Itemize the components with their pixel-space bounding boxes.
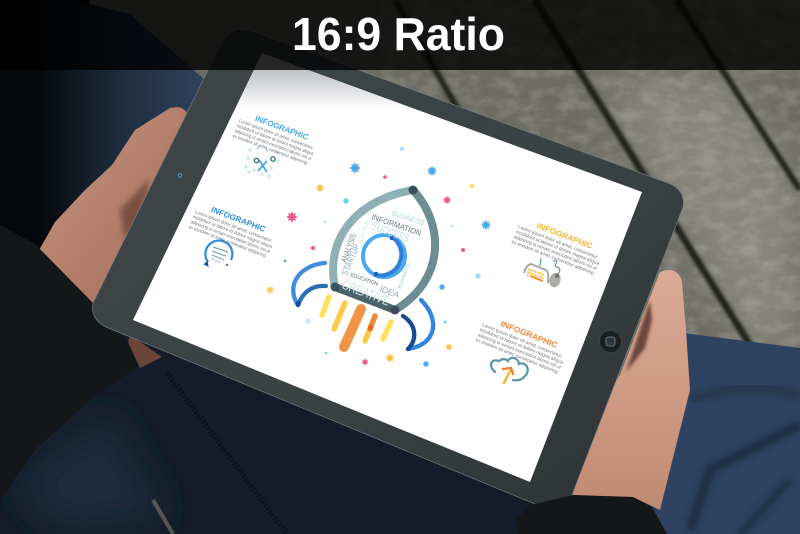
- text block: top left: [232, 109, 321, 167]
- heading: INFOGRAPHIC: [254, 114, 310, 142]
- word cloud: [339, 208, 425, 309]
- word cloud: BUSINESS: [390, 208, 425, 227]
- body text: incididunt ut labore et dolore magna aliqua: [515, 229, 600, 267]
- body text: incididunt ut labore et dolore magna aliqua: [479, 327, 564, 366]
- photo: jeans bottom: [0, 290, 800, 534]
- photo: dark left side and jeans top: [0, 0, 205, 300]
- word cloud: STARTUP: [340, 242, 363, 277]
- word cloud: SUCCESS: [370, 221, 411, 245]
- heading: INFOGRAPHIC: [499, 319, 559, 350]
- body text: adipiscing ut veniam exercitation laboris nisi ut: [234, 128, 313, 162]
- title: 16:9 Ratio: [292, 8, 505, 60]
- tablet home button: [600, 330, 622, 352]
- tablet screen: [133, 53, 642, 482]
- text block: top right: [511, 215, 606, 277]
- body text: adipiscing ut veniam exercitation laboris nisi ut: [477, 332, 562, 371]
- body text: Lorem ipsum dolor sit amet, consectetur,: [194, 209, 273, 244]
- icon: cloud upload: [491, 358, 528, 383]
- body text: ex eiusdem sit amet, consectetur adipiscing: [511, 239, 595, 276]
- title bar: [0, 0, 800, 70]
- word cloud: IDEA: [378, 284, 401, 300]
- tablet camera: [178, 174, 182, 177]
- body text: Lorem ipsum dolor sit amet, consectetur,: [481, 322, 563, 360]
- word cloud: INFORMATION: [370, 212, 423, 238]
- body text: ex eiusdem sit amet, consectetur adipiscing: [232, 133, 308, 166]
- icon: keyboard and mouse: [524, 258, 562, 289]
- photo: right sleeve: [516, 495, 667, 534]
- body text: incididunt ut labore et dolore magna aliqua: [192, 214, 273, 250]
- flames: [322, 297, 391, 347]
- body text: Lorem ipsum dolor sit amet, consectetur,: [517, 224, 599, 261]
- rocket body: [330, 186, 435, 314]
- word cloud: BUSINESS: [397, 263, 412, 290]
- body text: Lorem ipsum dolor sit amet, consectetur,: [238, 118, 314, 151]
- fin right: [403, 300, 433, 349]
- tablet: [93, 29, 683, 512]
- word cloud: EDUCATION: [349, 272, 379, 288]
- decorative stars: [267, 147, 490, 366]
- heading: INFOGRAPHIC: [535, 221, 594, 251]
- body text: [232, 118, 317, 167]
- body text: adipiscing ut veniam exercitation laboris nisi ut: [190, 219, 271, 255]
- fin left: [293, 263, 326, 307]
- word cloud: SOLUTION: [358, 219, 371, 244]
- word cloud: ANALYSIS: [339, 232, 358, 264]
- icon: speech bubble: [204, 241, 232, 266]
- photo: left hand: [38, 107, 188, 368]
- body text: ex eiusdem sit amet, consectetur adipiscing: [188, 224, 267, 259]
- photo: right hand: [573, 270, 690, 510]
- icon: crossed tools and gears: [244, 146, 280, 178]
- rocket window: [363, 235, 405, 277]
- body text: ex eiusdem sit amet, consectetur adipiscing: [475, 337, 559, 375]
- body text: incididunt ut labore et dolore magna aliqua: [236, 123, 314, 157]
- heading: INFOGRAPHIC: [210, 205, 267, 234]
- text block: bottom right: [475, 313, 570, 376]
- word cloud: CREATIVE: [340, 277, 392, 309]
- rocket: [293, 186, 435, 349]
- photo: left sleeve: [0, 225, 138, 500]
- text block: middle left: [188, 200, 280, 260]
- body text: adipiscing ut veniam exercitation laboris nisi ut: [513, 234, 598, 272]
